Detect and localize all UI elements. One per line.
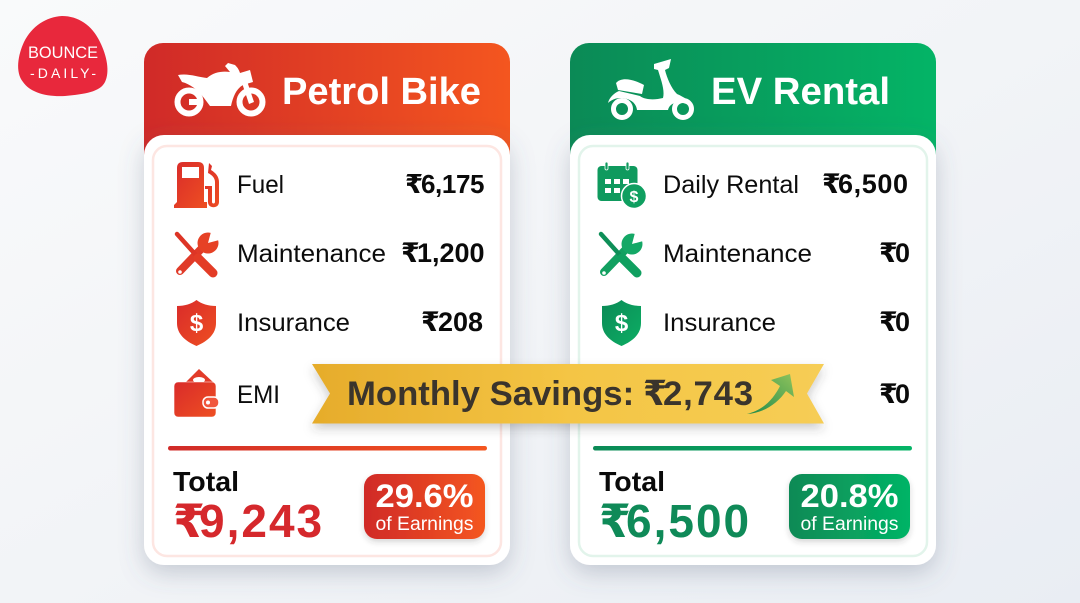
icon: calendar with dollar [598,162,646,208]
badge: 29.6% of earnings [364,474,485,539]
header: Petrol Bike [144,43,510,193]
banner: monthly savings [312,364,824,424]
row: Fuel: Fuel [237,171,284,199]
icon: growth arrow [747,374,794,414]
row: Insurance [177,300,483,346]
row: Maintenance: Maintenance [663,240,812,268]
row: Maintenance: ₹ [879,238,898,268]
row: Fuel: ₹ [405,169,423,199]
logo: Bounce Daily: BOUNCE [28,43,98,62]
card body [144,135,510,565]
row: Maintenance: Maintenance [237,240,386,268]
row: Daily Rental: Daily Rental [663,171,799,199]
total: EV Rental: Total [599,466,665,497]
divider [168,446,487,450]
total: EV Rental: 6,500 [626,495,751,547]
badge: 29.6% of earnings: 29.6% [376,478,474,514]
icon: scooter [608,59,693,118]
row: Daily Rental: ₹ [822,169,841,199]
row: EMI [174,369,280,417]
badge: 20.8% of earnings: 20.8% [800,478,898,514]
heading: EV Rental: EV Rental [711,71,890,113]
icon: wallet [174,369,219,417]
total: Petrol Bike: ₹ [173,495,207,547]
icon: shield: $ [615,310,629,337]
total: Petrol Bike: Total [173,466,239,497]
row: Insurance: 0 [895,307,910,337]
icon: motorcycle [178,63,262,114]
row: Maintenance: ₹ [401,238,420,268]
row: Maintenance [601,229,910,275]
row: Insurance: 208 [438,307,483,337]
logo: Bounce Daily [18,16,107,96]
row: Maintenance: 1,200 [417,238,485,268]
row: Insurance: ₹ [421,307,440,337]
row: EMI value: ₹ [879,379,898,409]
row: Maintenance: 0 [895,238,910,268]
row: Daily Rental: 6,500 [838,169,909,199]
row: EMI: EMI [237,381,280,409]
row: Fuel: 6,175 [421,169,484,199]
row: Insurance: Insurance [663,309,776,337]
badge: 29.6% of earnings: of Earnings [376,514,474,535]
icon: fuel pump [174,162,219,208]
badge: 20.8% of earnings: of Earnings [800,514,898,535]
row: EMI value: 0 [895,379,910,409]
total: EV Rental: ₹ [599,495,633,547]
card body [570,135,936,565]
banner: monthly savings: ₹ [643,375,667,413]
logo: Bounce Daily: -DAILY- [30,65,96,81]
icon: shield: $ [190,310,204,337]
panel: EV Rental [570,43,936,565]
panel: Petrol Bike [144,43,510,565]
total: EV Rental [599,466,751,547]
row: Insurance: ₹ [879,307,898,337]
badge: 20.8% of earnings [789,474,910,539]
total: Petrol Bike: 9,243 [199,495,324,547]
icon: wrench and screwdriver [601,229,647,275]
row: Fuel [174,162,484,208]
row: Insurance: Insurance [237,309,350,337]
banner: monthly savings: 2,743 [663,375,754,413]
icon: wrench and screwdriver [177,228,223,274]
row: Daily Rental [598,162,909,208]
divider [593,446,912,450]
heading: Petrol Bike: Petrol Bike [282,71,481,113]
row: Maintenance [177,228,485,274]
icon: shield [177,300,216,346]
icon: calendar with dollar: $ [630,189,639,206]
icon: shield [602,300,641,346]
header: EV Rental [570,43,936,193]
row: Insurance [602,300,910,346]
total: Petrol Bike [173,466,324,547]
banner: monthly savings: Monthly Savings: [347,375,634,413]
